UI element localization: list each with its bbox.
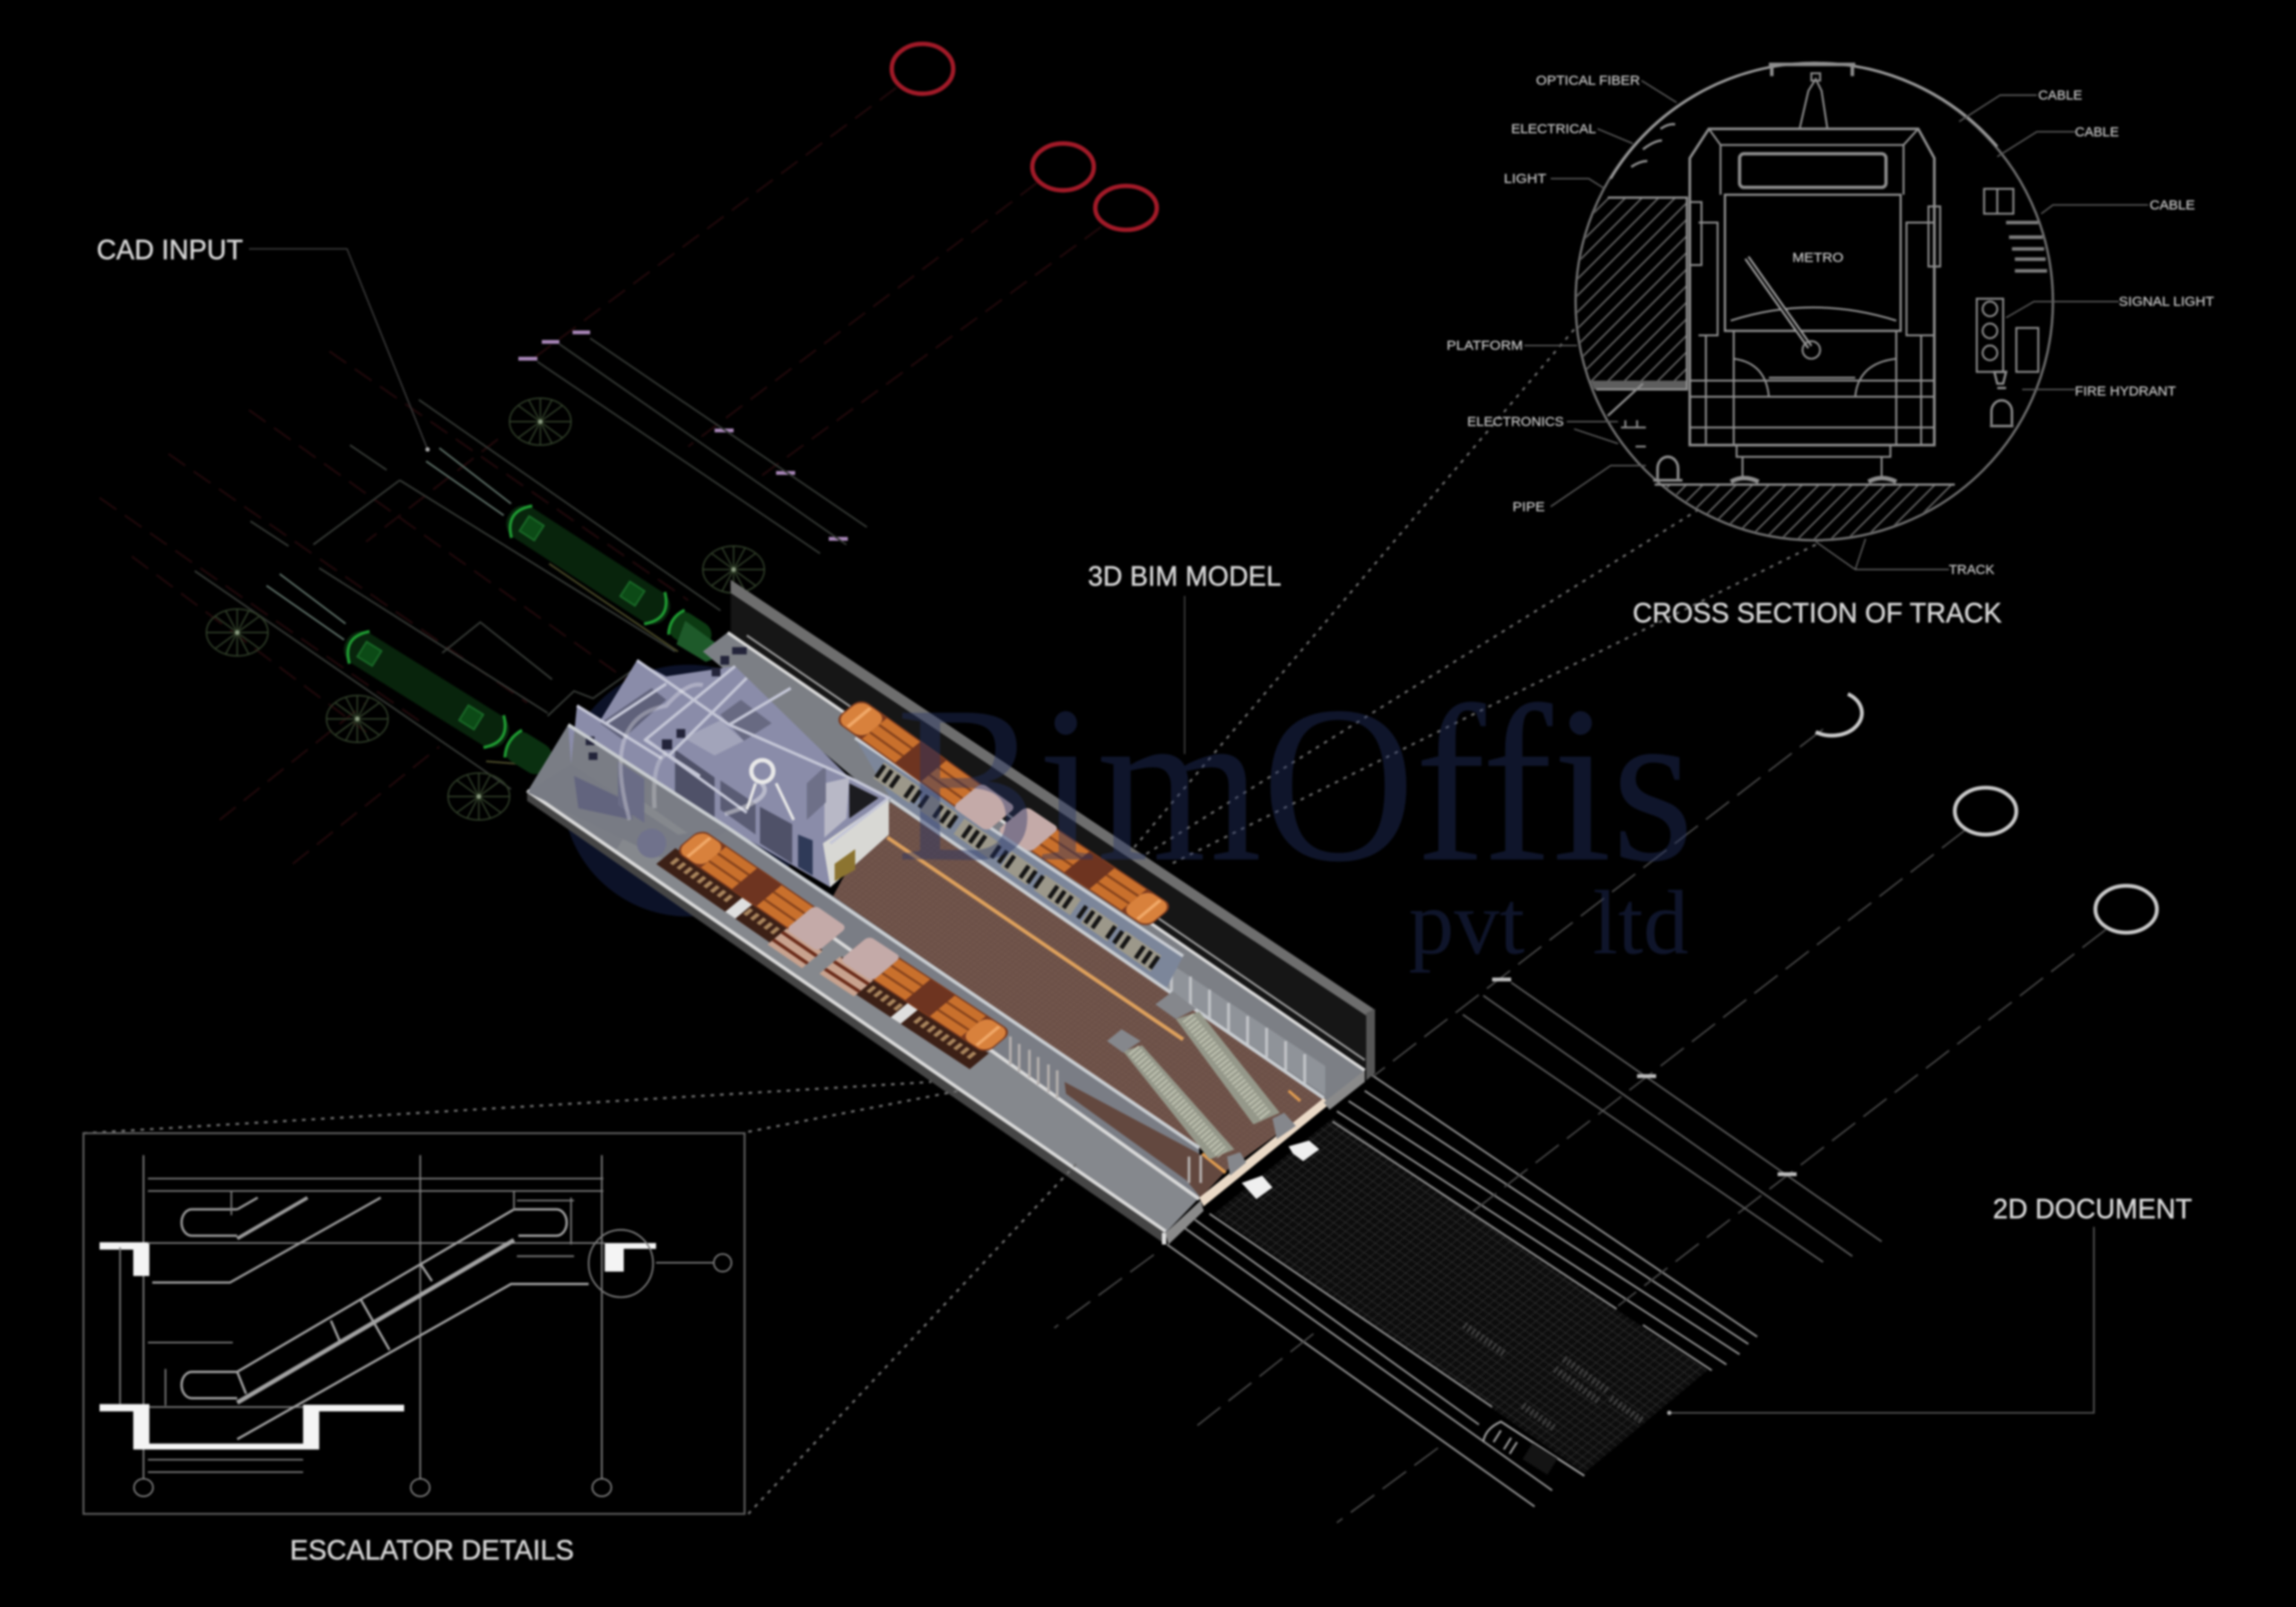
concrete slabs <box>100 1242 656 1449</box>
walkway slab <box>615 803 1199 1233</box>
left band <box>527 725 1226 1245</box>
right platform band <box>703 632 1365 1107</box>
cross section labels: PIPE <box>1513 500 1545 515</box>
red column circles <box>891 44 1157 230</box>
CAD INPUT label <box>97 234 430 452</box>
room wall with door <box>823 798 889 887</box>
CROSS SECTION OF TRACK heading: CROSS SECTION OF TRACK <box>1632 597 2002 629</box>
2D DOCUMENT label <box>1667 1193 2192 1415</box>
green train plan upper <box>500 498 719 659</box>
tunnel upper arc highlight <box>1611 63 1997 178</box>
panel: escalator details <box>83 1134 744 1514</box>
dotted projection lines to cross section <box>1120 329 1815 864</box>
cross section labels <box>1447 74 2214 578</box>
escalator upper <box>1155 991 1296 1139</box>
column fans <box>509 398 571 445</box>
train D <box>820 934 1015 1071</box>
logo disc behind model <box>562 665 814 916</box>
panel: cross section of track <box>1525 63 2148 569</box>
leaders <box>1525 81 2148 569</box>
cross section labels: OPTICAL FIBER <box>1536 74 1640 89</box>
layer: 3D BIM model <box>527 580 1375 1245</box>
frame <box>83 1134 744 1514</box>
railing bars <box>1011 1037 1201 1183</box>
green glow at station head <box>676 621 729 662</box>
CAD INPUT label: CAD INPUT <box>97 234 243 265</box>
upper escalator cut <box>152 1198 380 1282</box>
plan lines <box>419 338 867 611</box>
white column circles <box>1815 694 2157 933</box>
dotted projection lines to escalator details <box>83 1082 1076 1514</box>
station building block <box>527 647 1199 1148</box>
watermark text BimOffis: BimOffis <box>896 660 1694 908</box>
dimensions <box>120 1178 604 1472</box>
cross section labels: CABLE <box>2150 198 2196 213</box>
3D BIM MODEL label: 3D BIM MODEL <box>1088 560 1282 592</box>
light wall <box>824 777 849 838</box>
concourse floor <box>833 799 1324 1173</box>
track tie details <box>1465 1325 1643 1429</box>
green train plan lower <box>337 623 558 782</box>
wall services right <box>1984 189 2013 213</box>
cross section labels: METRO <box>1792 251 1844 265</box>
rails <box>1167 1073 1757 1507</box>
cross section labels: ELECTRICAL <box>1511 123 1596 137</box>
grid markers and lines <box>1463 983 1882 1262</box>
layer: 2D document track <box>1055 694 2157 1523</box>
central room top <box>720 699 771 741</box>
2D DOCUMENT label: 2D DOCUMENT <box>1993 1193 2192 1224</box>
back wall <box>731 580 1375 1081</box>
main escalator <box>181 1210 588 1439</box>
dark walls <box>675 750 715 819</box>
pink grid markers <box>518 333 848 539</box>
pantograph <box>1769 65 1856 76</box>
cross section labels: CABLE <box>2039 89 2083 103</box>
duct holes <box>586 647 747 760</box>
cross section labels: FIRE HYDRANT <box>2074 385 2176 399</box>
cross section labels: LIGHT <box>1504 172 1546 187</box>
cross section labels: ELECTRONICS <box>1467 415 1564 430</box>
cross section labels: SIGNAL LIGHT <box>2118 295 2214 309</box>
grid lines to white circles <box>1055 729 2106 1523</box>
escalator lower <box>1107 1029 1246 1176</box>
wiper <box>1747 257 1810 347</box>
building wall lines <box>577 660 889 843</box>
metro train front <box>1690 129 1940 482</box>
train C <box>654 827 849 969</box>
logo blob on slab <box>637 829 666 858</box>
cross section labels: TRACK <box>1949 563 1995 578</box>
station end strips <box>1166 1070 1365 1245</box>
platform edges <box>1596 197 1955 484</box>
logo swoosh <box>621 684 703 820</box>
platform screen windows <box>855 738 1183 990</box>
platform hatch <box>1576 197 1952 540</box>
floor rail along building <box>568 725 1199 1148</box>
faint red grid lines <box>100 88 1101 864</box>
grid axes with bubbles <box>144 1155 602 1479</box>
layer: CAD input plan <box>100 44 1157 864</box>
track grid <box>1213 1118 1708 1472</box>
cross section labels: PLATFORM <box>1447 339 1523 353</box>
ESCALATOR DETAILS heading: ESCALATOR DETAILS <box>290 1534 574 1566</box>
slab under building <box>527 764 732 864</box>
detail callout <box>588 1229 653 1298</box>
wall services left <box>1631 124 1675 167</box>
brown strip beside rail <box>1065 1082 1226 1198</box>
cross section labels: CABLE <box>2074 126 2119 140</box>
train B <box>997 806 1175 930</box>
tunnel circle <box>1576 63 2053 540</box>
train A <box>832 697 1016 831</box>
watermark text pvt ltd: pvt ltd <box>1409 873 1689 973</box>
platform fence panels <box>1157 954 1326 1095</box>
track end symbol <box>1483 1421 1585 1476</box>
dark room opening <box>849 783 879 819</box>
